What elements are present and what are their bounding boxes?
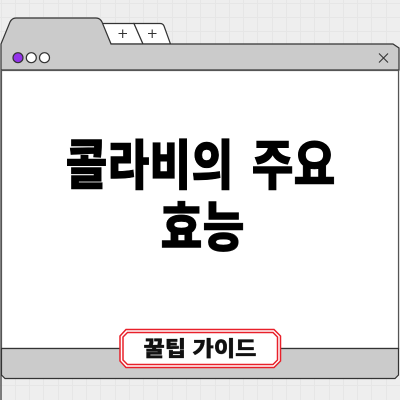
- badge: tip guide: 꿀팁 가이드: [144, 338, 256, 361]
- title: [66, 136, 335, 258]
- badge: tip guide: [120, 330, 280, 368]
- window dot: white 2: [40, 53, 50, 63]
- window dot: purple: [13, 53, 23, 63]
- title: 콜라비의 주요: [66, 136, 335, 196]
- tab: plus 1: [102, 24, 143, 44]
- tab: plus 2: [134, 24, 170, 44]
- bottom bar: [2, 348, 398, 378]
- window content area: [2, 70, 398, 348]
- window dot: white 1: [26, 53, 36, 63]
- title: 효능: [161, 198, 244, 258]
- icon: close: [379, 54, 388, 62]
